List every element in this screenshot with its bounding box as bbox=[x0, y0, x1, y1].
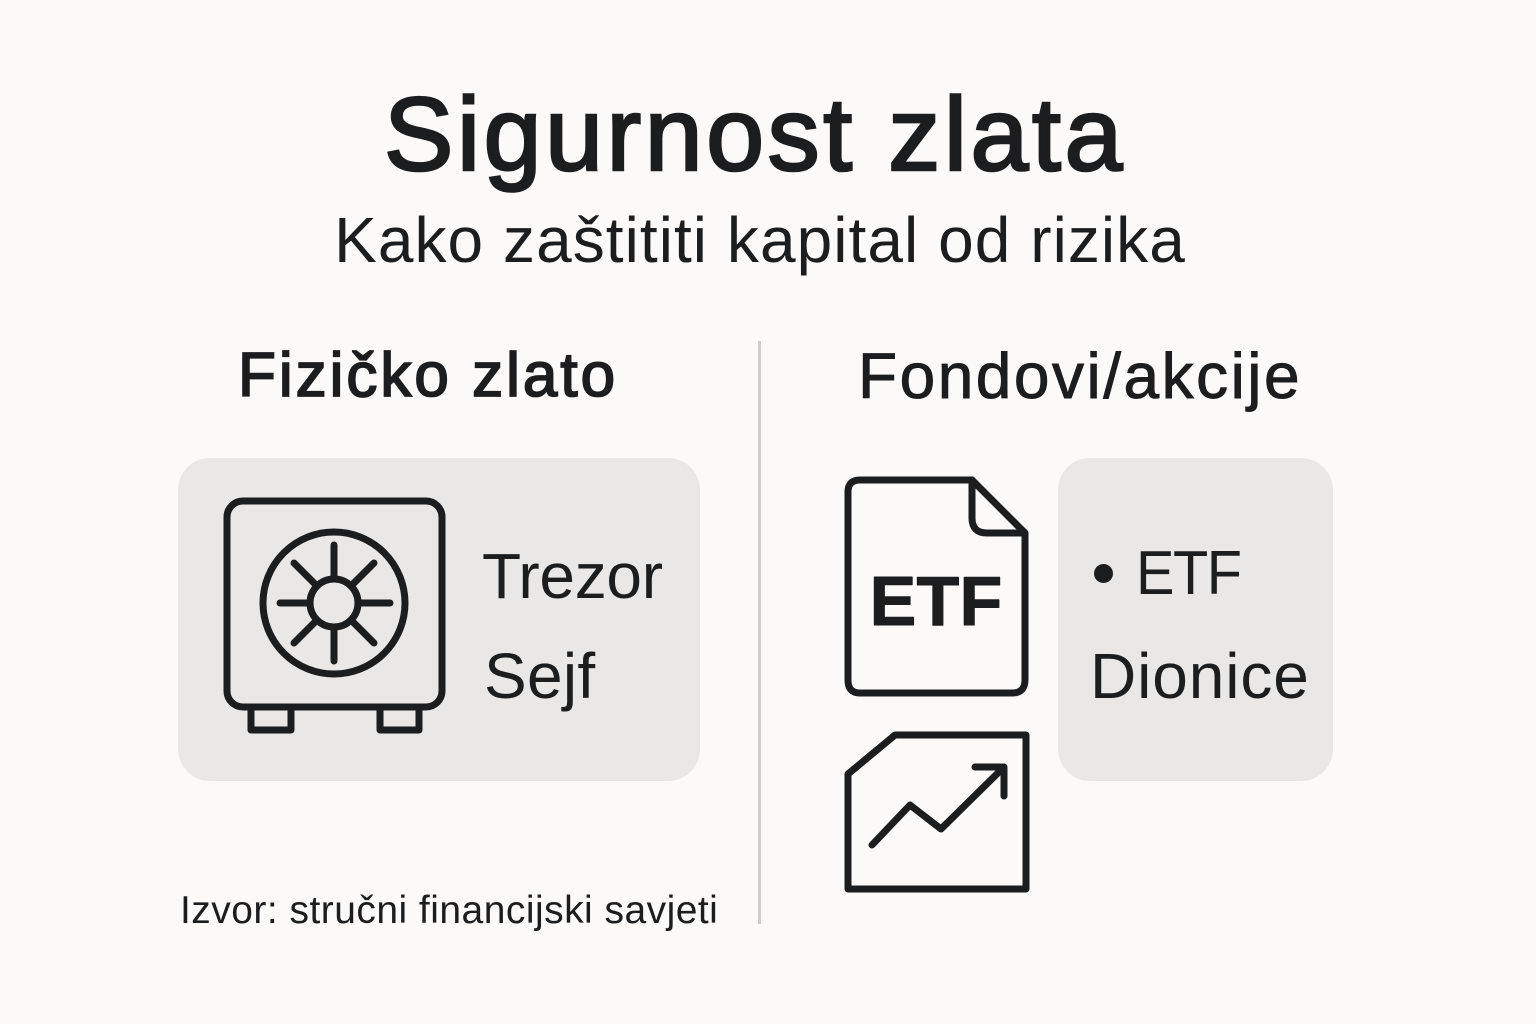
source note: Izvor: stručni financijski savjeti bbox=[180, 889, 718, 932]
list item: ETF: ETF bbox=[1136, 539, 1240, 608]
icon: ETF document: ETF bbox=[870, 562, 1002, 640]
panel: funds list bbox=[1058, 458, 1333, 781]
panel: physical gold bbox=[178, 458, 700, 781]
heading: physical gold: Fizičko zlato bbox=[238, 341, 618, 410]
label: safe: Sejf bbox=[484, 640, 595, 712]
heading: funds and stocks: Fondovi/akcije bbox=[858, 340, 1302, 412]
title: Sigurnost zlata bbox=[384, 77, 1126, 193]
subtitle: Kako zaštititi kapital od rizika bbox=[334, 204, 1186, 276]
divider bbox=[758, 341, 761, 924]
label: vault: Trezor bbox=[482, 540, 663, 612]
list item: stocks: Dionice bbox=[1090, 640, 1310, 712]
